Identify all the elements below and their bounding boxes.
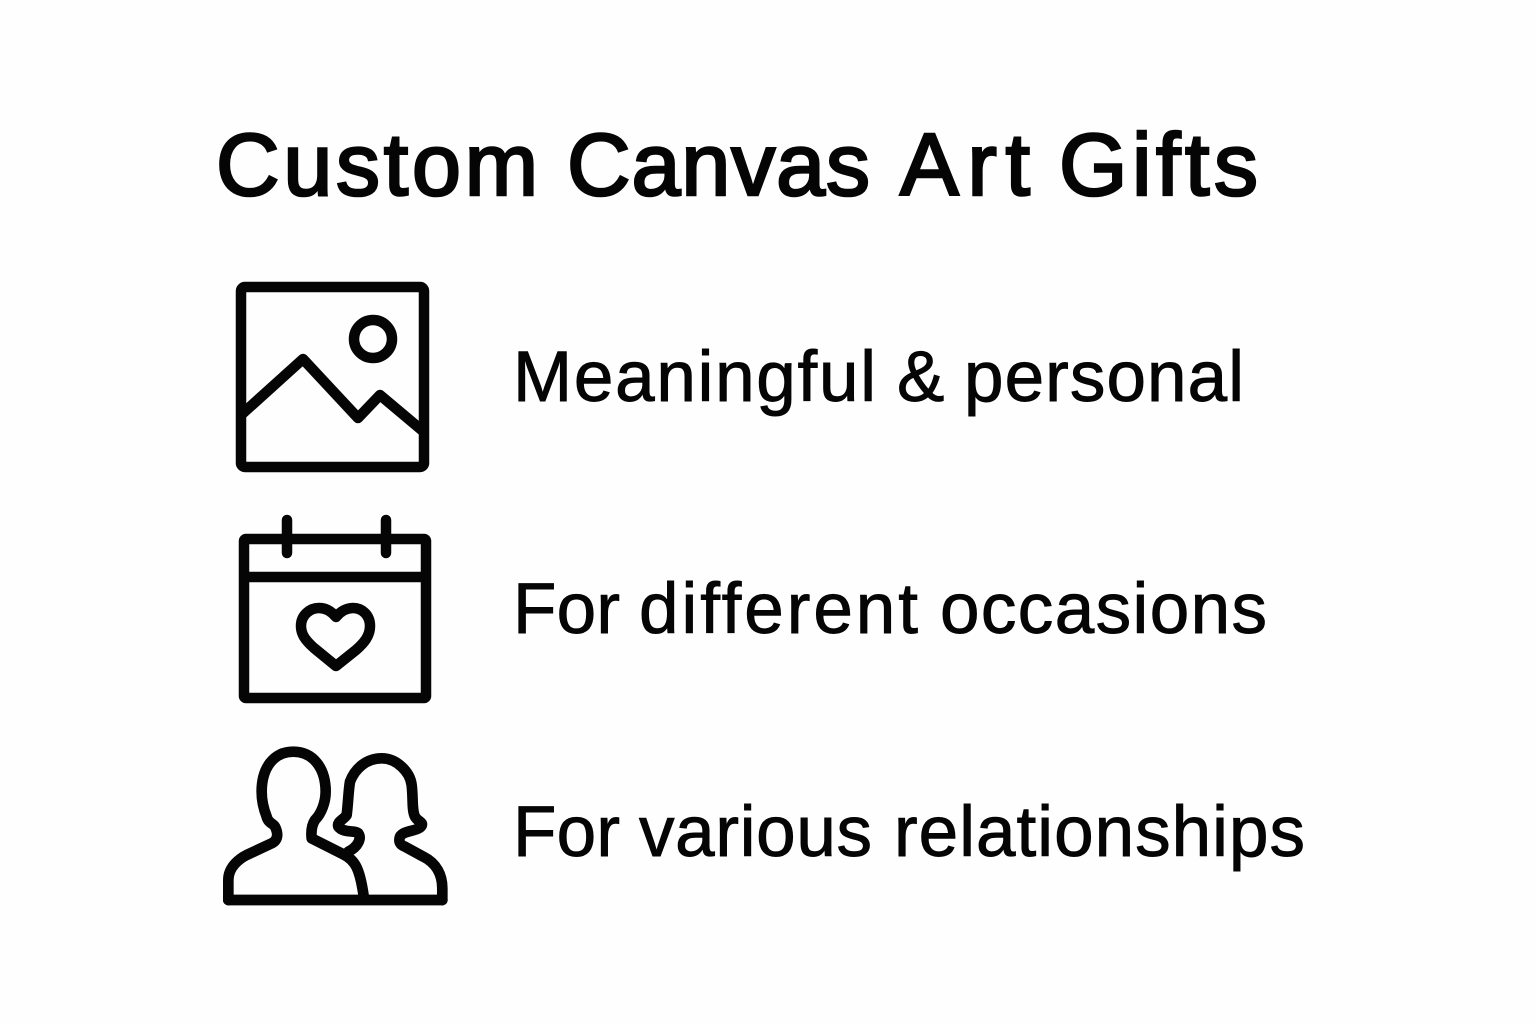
label: for different occasions: occasions (940, 570, 1267, 649)
label: for different occasions: For (513, 570, 620, 649)
icon: two people (228, 752, 442, 900)
icon: calendar with heart (244, 520, 426, 698)
icon: framed landscape picture (241, 287, 424, 467)
label: meaningful and personal: personal (964, 338, 1244, 417)
label: for various relationships: For (513, 793, 620, 872)
label: for various relationships: various (639, 793, 872, 872)
label: for different occasions: different (639, 570, 918, 649)
label: for various relationships: relationships (894, 793, 1305, 872)
title: Art (900, 115, 1030, 214)
title: Canvas (567, 115, 870, 214)
label: meaningful and personal: & (897, 338, 944, 417)
title: Gifts (1059, 115, 1258, 214)
label: meaningful and personal: Meaningful (513, 338, 876, 417)
title: Custom (216, 115, 538, 214)
